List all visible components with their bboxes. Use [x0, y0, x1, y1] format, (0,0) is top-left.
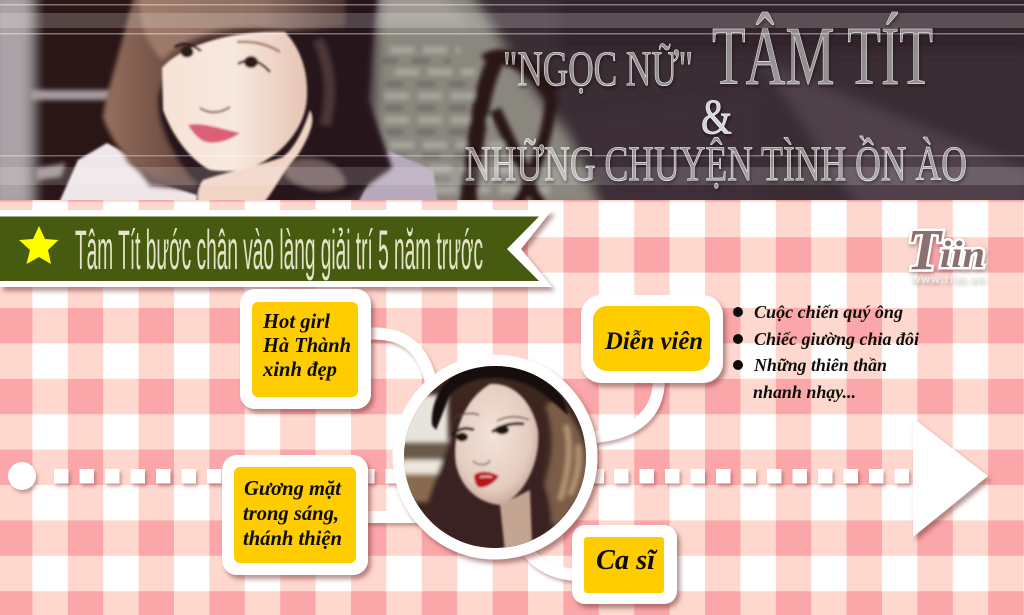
film list: Chiếc giường chia đôi: [754, 329, 919, 349]
box: Gương mặt trong sáng, thánh thiện: Gương mặt: [244, 476, 342, 500]
face: [162, 32, 312, 205]
header photo: [0, 0, 1024, 210]
box: Gương mặt trong sáng, thánh thiện: trong sáng,: [243, 501, 339, 525]
film list: [733, 302, 919, 402]
gingham background: [0, 200, 1024, 615]
title: [465, 10, 967, 191]
box: Gương mặt trong sáng, thánh thiện: [222, 455, 368, 575]
box: Hot girl Hà Thành xinh đẹp: xinh đẹp: [262, 357, 337, 381]
icon: star: [19, 226, 58, 264]
connectors: [360, 334, 659, 575]
box: Hot girl Hà Thành xinh đẹp: Hot girl: [262, 309, 330, 333]
film list: Cuộc chiến quý ông: [754, 302, 903, 322]
logo: Tiin: www.tiin.vn: [911, 274, 985, 286]
title: "NGỌC NỮ": [503, 40, 693, 96]
box: Ca sĩ: [572, 525, 677, 604]
overlay strips: [0, 4, 1024, 185]
shirt: [58, 143, 438, 205]
logo: Tiin: iin: [940, 234, 985, 276]
circular portrait: [392, 354, 598, 560]
box: Diễn viên: [581, 295, 723, 383]
box: Gương mặt trong sáng, thánh thiện: thánh thiện: [243, 526, 342, 550]
logo: Tiin: T: [907, 217, 943, 282]
box: Ca sĩ: Ca sĩ: [596, 544, 658, 576]
hair: [103, 0, 392, 205]
logo: Tiin: [907, 217, 985, 286]
arrow head: [913, 418, 988, 537]
banner ribbon: [0, 210, 552, 287]
box: Hot girl Hà Thành xinh đẹp: Hà Thành: [262, 333, 351, 357]
box: Diễn viên: Diễn viên: [604, 328, 703, 355]
title: &: [701, 88, 732, 144]
timeline dots: [8, 462, 909, 490]
film list: Những thiên thần: [753, 355, 887, 375]
film list: nhanh nhạy...: [753, 382, 856, 402]
box: Hot girl Hà Thành xinh đẹp: [240, 289, 371, 409]
